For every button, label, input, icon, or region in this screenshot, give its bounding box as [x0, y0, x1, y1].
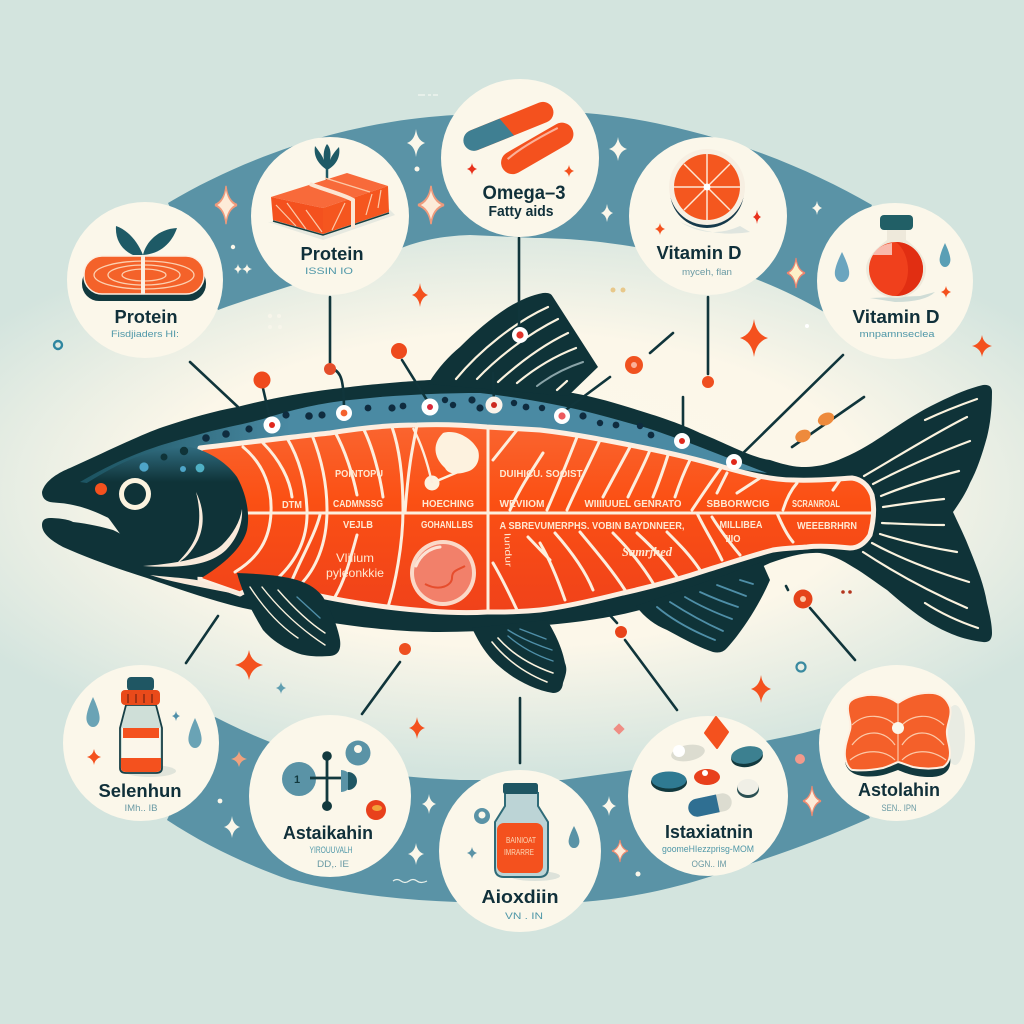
sub heading: Fatty aids: [488, 203, 554, 220]
flesh labels: SBBORWCIG: [706, 498, 770, 510]
eye: [119, 478, 151, 510]
flesh labels: WEVIIOM: [500, 498, 545, 510]
circle: protein block: [251, 137, 409, 295]
icon: molecule: 1: [294, 774, 300, 786]
icon: salmon steak: [82, 226, 206, 301]
flesh labels: MILLIBEA: [720, 519, 763, 531]
sub label: myceh, flan: [682, 267, 732, 278]
sub label: IMh.. IB: [124, 803, 158, 814]
flesh labels: Samrjhed: [622, 544, 672, 559]
flesh labels: GOHANLLBS: [421, 519, 473, 531]
heading: Vitamin D: [656, 243, 742, 263]
sub label: ISSIN IO: [305, 266, 353, 277]
heading: Istaxiatnin: [665, 822, 753, 842]
flesh labels: [282, 468, 857, 580]
heading: Astolahin: [858, 780, 940, 800]
heading: Protein: [300, 244, 364, 264]
pin lines: [186, 238, 864, 763]
sub label: YIROUUVALH: [310, 845, 353, 856]
back spots: [202, 396, 654, 442]
heading: Omega–3: [482, 183, 566, 204]
sub label: goomeHIezzprisg-MOM: [662, 844, 754, 855]
orange beads: [793, 410, 836, 445]
icon: jar: [467, 783, 579, 881]
flesh labels: POINTOPU: [335, 468, 383, 480]
flesh labels: SCRANROAL: [792, 498, 840, 510]
salmon illustration: [42, 293, 992, 693]
circle: omega-3: [441, 79, 599, 237]
head colour spots: [95, 447, 204, 495]
heading: Protein: [114, 307, 178, 327]
sub label: mnpamnseclea: [860, 329, 935, 340]
icon: butterfly fillet: [845, 693, 965, 777]
flesh stripes: [205, 425, 874, 612]
flesh labels: Vlilium: [336, 551, 374, 565]
sub label: SEN.. IPN: [882, 803, 917, 814]
flesh labels: DTM: [282, 499, 302, 511]
heading: Selenhun: [98, 781, 182, 801]
flesh labels: IIIO: [726, 533, 740, 545]
sub label: Fisdjiaders HI:: [111, 329, 179, 340]
heading: Astaikahin: [283, 823, 373, 843]
white markers: [264, 327, 742, 470]
head: [82, 447, 248, 595]
circle: istaxiatnin pills: [628, 716, 788, 876]
icon: salmon block: [268, 144, 395, 240]
icon: bottle with drops: [835, 215, 951, 302]
circle: vitamin D citrus: [629, 137, 787, 295]
flesh labels: HOECHING: [422, 498, 474, 510]
icon: capsules: [460, 99, 578, 178]
anal fin: [636, 562, 770, 652]
connector lines and pins: [186, 238, 864, 763]
heading: Vitamin D: [852, 307, 940, 327]
icon: pills: [651, 717, 764, 818]
circle: vitamin D bottle: [817, 203, 973, 359]
fish body and tail: [42, 380, 992, 642]
circle: selenium bottle: [63, 665, 219, 821]
circle: protein steak: [67, 202, 223, 358]
icon: bottle: [86, 677, 202, 777]
sub label: VN . IN: [505, 911, 543, 922]
belly circle: [410, 540, 476, 606]
circle: aioxdiin jar: [439, 770, 601, 932]
icon: molecule: [282, 740, 386, 820]
flesh labels: VEJLB: [343, 519, 373, 531]
sub label line 2: OGN.. IM: [692, 859, 727, 870]
pectoral fin: [237, 573, 340, 656]
stomach blob: [413, 428, 479, 490]
sub label line 2: DD,. IE: [317, 859, 349, 870]
circle: astolahin fillet: [819, 665, 975, 821]
icon: jar: BAINIOAT: [506, 836, 536, 845]
gill lines: [143, 492, 242, 595]
tail rays: [863, 399, 978, 628]
dorsal fin: [428, 293, 598, 396]
top teal arc band: [168, 113, 872, 312]
decorative sparkles: [54, 95, 992, 882]
teal back band: [80, 393, 767, 485]
flesh labels: pyleonkkie: [326, 566, 384, 580]
flesh labels: WIIIIUUEL GENRATO: [584, 498, 682, 510]
flesh labels: CADMNSSG: [333, 498, 383, 510]
flesh labels: WEEEBRHRN: [797, 520, 857, 532]
circle: astaxanthin molecule: [249, 715, 411, 877]
salmon flesh: [200, 425, 874, 613]
heading: Aioxdiin: [482, 887, 558, 907]
pin balls: [254, 343, 852, 655]
icon: citrus slice: [655, 149, 761, 235]
flesh labels: A SBREVUMERPHS. VOBIN BAYDNNEER,: [500, 520, 685, 532]
flesh labels: DUIHICU. SOOIST: [500, 468, 583, 480]
pelvic fin: [472, 620, 566, 693]
bottom teal arc band: [167, 717, 870, 902]
flesh labels: Iundur: [502, 533, 514, 567]
icon: jar: IMRARRE: [504, 848, 534, 857]
